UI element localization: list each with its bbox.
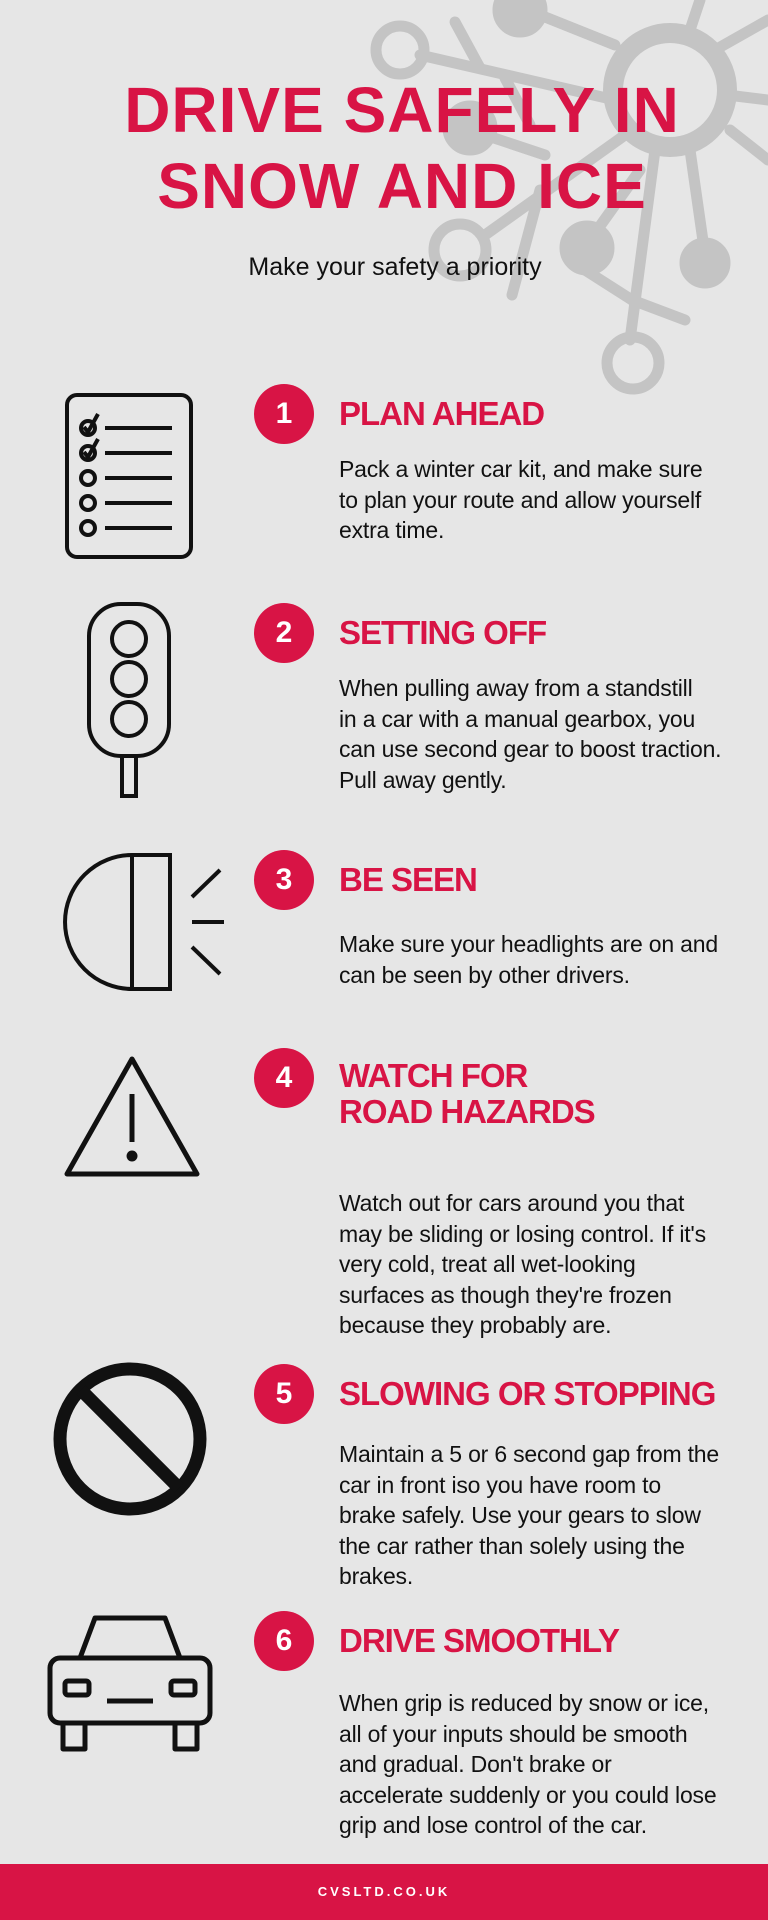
body 4 xyxy=(339,1190,706,1338)
subtitle: Make your safety a priority xyxy=(248,253,542,281)
heading 2: SETTING OFF xyxy=(339,614,546,651)
number 5 xyxy=(254,1364,314,1424)
body 3: can be seen by other drivers. xyxy=(339,962,630,988)
body 6: and gradual. Don't brake or xyxy=(339,1751,612,1777)
body 1 xyxy=(339,456,703,543)
body 2: can use second gear to boost traction. xyxy=(339,736,721,762)
number 3: 3 xyxy=(276,863,292,896)
number 4: 4 xyxy=(276,1061,292,1094)
body 4: may be sliding or losing control. If it's xyxy=(339,1220,706,1246)
body 3 xyxy=(339,931,718,988)
body 6: accelerate suddenly or you could lose xyxy=(339,1782,716,1808)
title xyxy=(124,74,680,222)
number 6 xyxy=(254,1611,314,1671)
footer xyxy=(0,1864,768,1920)
body 2: Pull away gently. xyxy=(339,766,506,792)
icon: checklist xyxy=(65,393,193,559)
heading 5: SLOWING OR STOPPING xyxy=(339,1375,715,1412)
heading 6: DRIVE SMOOTHLY xyxy=(339,1622,619,1659)
body 5: the car rather than solely using the xyxy=(339,1532,685,1558)
body 6: When grip is reduced by snow or ice, xyxy=(339,1690,709,1716)
footer: CVSLTD.CO.UK xyxy=(318,1884,450,1899)
body 6: all of your inputs should be smooth xyxy=(339,1720,687,1746)
body 2: When pulling away from a standstill xyxy=(339,675,692,701)
number 1 xyxy=(254,384,314,444)
heading 4: WATCH FOR xyxy=(339,1057,527,1094)
body 4: Watch out for cars around you that xyxy=(339,1190,684,1216)
title: SNOW AND ICE xyxy=(157,150,647,222)
body 2: in a car with a manual gearbox, you xyxy=(339,706,695,732)
body 6: grip and lose control of the car. xyxy=(339,1812,647,1838)
body 5 xyxy=(339,1441,719,1589)
body 4: very cold, treat all wet-looking xyxy=(339,1251,636,1277)
number 2 xyxy=(254,603,314,663)
title: DRIVE SAFELY IN xyxy=(124,74,680,146)
body 5: car in front iso you have room to xyxy=(339,1472,661,1498)
snowflake decoration xyxy=(370,0,768,394)
icon: car xyxy=(48,1616,212,1752)
icon: traffic light xyxy=(87,602,171,798)
body 1: to plan your route and allow yourself xyxy=(339,486,701,512)
body 1: extra time. xyxy=(339,517,444,543)
heading 4: ROAD HAZARDS xyxy=(339,1093,595,1130)
icon: headlight xyxy=(63,853,224,991)
icon: no entry sign xyxy=(54,1362,206,1516)
body 3: Make sure your headlights are on and xyxy=(339,931,718,957)
body 5: brake safely. Use your gears to slow xyxy=(339,1502,701,1528)
heading 3: BE SEEN xyxy=(339,861,477,898)
number 4 xyxy=(254,1048,314,1108)
body 1: Pack a winter car kit, and make sure xyxy=(339,456,703,482)
body 4: surfaces as though they're frozen xyxy=(339,1282,672,1308)
number 2: 2 xyxy=(276,616,292,649)
body 5: brakes. xyxy=(339,1563,413,1589)
number 5: 5 xyxy=(276,1377,292,1410)
heading 4 xyxy=(339,1057,595,1130)
number 3 xyxy=(254,850,314,910)
body 5: Maintain a 5 or 6 second gap from the xyxy=(339,1441,719,1467)
body 4: because they probably are. xyxy=(339,1312,611,1338)
number 1: 1 xyxy=(276,397,292,430)
number 6: 6 xyxy=(276,1624,292,1657)
body 6 xyxy=(339,1690,716,1838)
body 2 xyxy=(339,675,721,793)
icon: warning triangle xyxy=(64,1056,200,1176)
heading 1: PLAN AHEAD xyxy=(339,395,544,432)
